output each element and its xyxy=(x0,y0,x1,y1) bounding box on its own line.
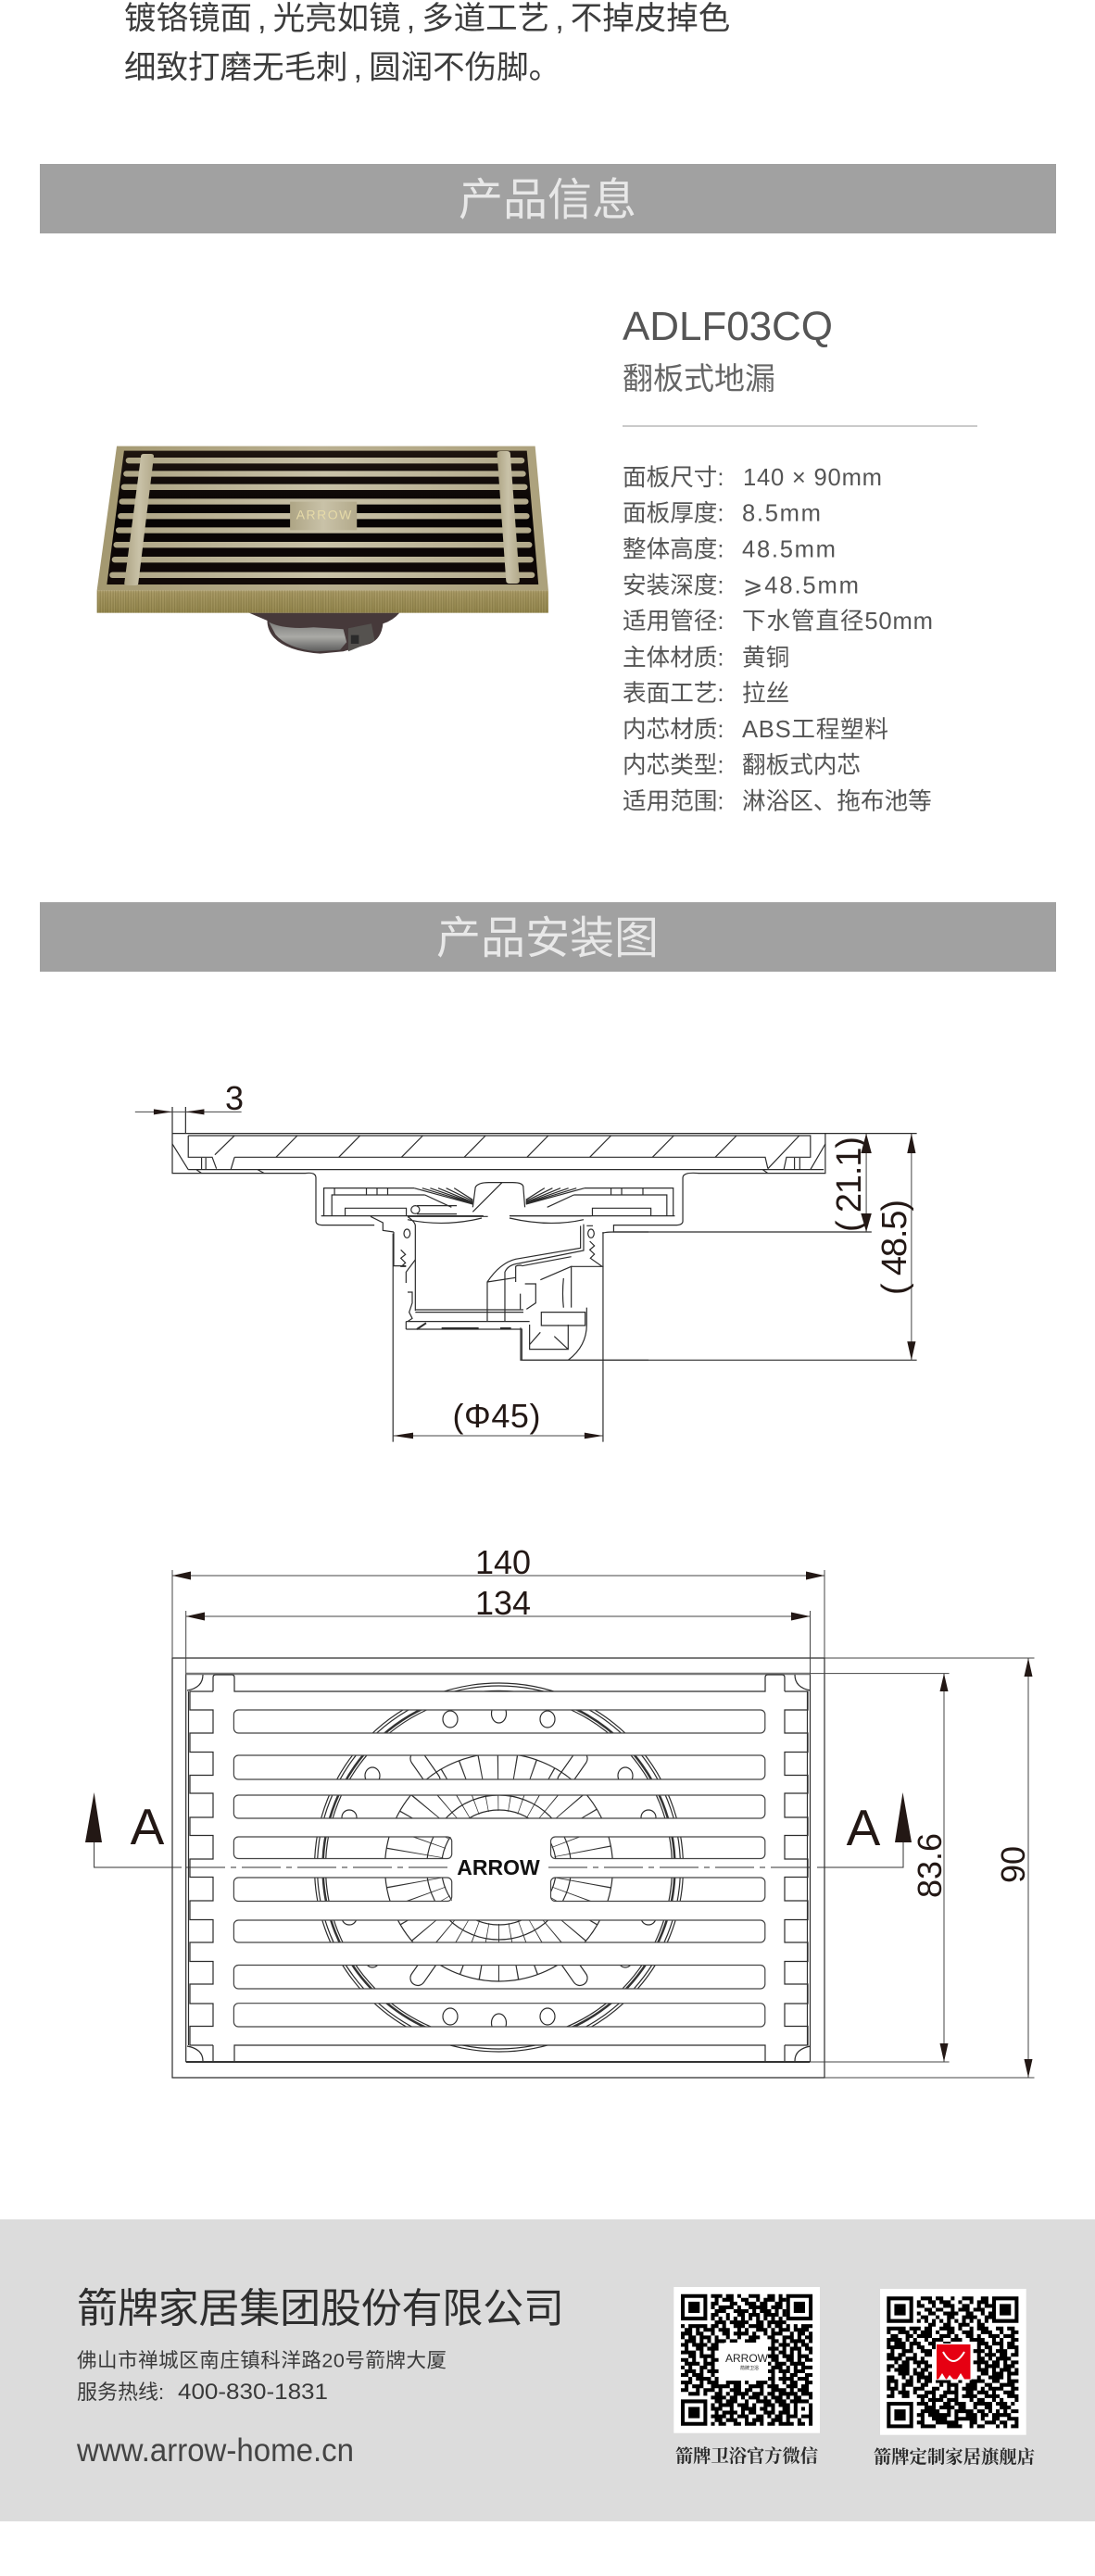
spec list: 面板厚度: xyxy=(623,500,724,526)
section heading: installation diagram xyxy=(40,902,1056,972)
spec list: 淋浴区、拖布池等 xyxy=(742,787,932,815)
grate bars xyxy=(109,451,535,585)
spec list: 面板尺寸: xyxy=(623,464,724,491)
plan view drawing xyxy=(85,1543,1034,2078)
QR caption: flagship store: 箭牌定制家居旗舰店 xyxy=(874,2446,1035,2468)
cross-section drawing xyxy=(135,1079,917,1442)
spec list: ⩾48.5mm xyxy=(743,572,859,598)
model title: ADLF03CQ xyxy=(623,304,833,349)
width dimensions: 134 xyxy=(475,1584,531,1622)
width dimensions: 140 xyxy=(475,1543,531,1581)
website: www.arrow-home.cn xyxy=(76,2432,354,2469)
QR caption: official WeChat: 箭牌卫浴官方微信 xyxy=(675,2446,818,2467)
section outline and flange xyxy=(135,1107,917,1442)
footer panel xyxy=(0,2219,1095,2521)
dimension: 3: 3 xyxy=(225,1079,244,1117)
company name: 箭牌家居集团股份有限公司 xyxy=(77,2286,564,2331)
spec list: 内芯类型: xyxy=(623,752,724,778)
QR code: official WeChat: ARROW xyxy=(725,2352,769,2365)
intro text block: 镀铬镜面,光亮如镜,多道工艺,不掉皮掉色 xyxy=(124,2,730,37)
QR code: official WeChat: 箭牌卫浴 xyxy=(740,2365,759,2371)
dimension: 48.5: ( 48.5) xyxy=(875,1200,914,1295)
intro text block xyxy=(124,2,730,85)
spec list: 主体材质: xyxy=(623,645,724,671)
product type: 翻板式地漏 xyxy=(623,361,775,396)
spec list: ABS工程塑料 xyxy=(742,716,888,743)
intro text block: 细致打磨无毛刺,圆润不伤脚。 xyxy=(124,50,560,85)
grate logo: ARROW xyxy=(457,1855,540,1879)
section line A-A xyxy=(85,1792,912,1867)
section heading: product info: 产品信息 xyxy=(459,176,636,225)
grate slots xyxy=(233,1710,765,2027)
grate outline xyxy=(187,1675,811,2061)
logo on grate: ARROW xyxy=(296,507,353,521)
spec list: 下水管直径50mm xyxy=(742,608,933,635)
panel top face xyxy=(97,446,548,590)
QR code: custom home flagship store xyxy=(880,2289,1026,2435)
dimension: phi 45: (Φ45) xyxy=(452,1397,541,1435)
address: 佛山市禅城区南庄镇科洋路20号箭牌大厦 xyxy=(77,2349,447,2371)
section heading: product info xyxy=(40,164,1056,233)
spec list: 表面工艺: xyxy=(623,680,724,707)
section line A-A: A xyxy=(847,1799,881,1856)
spec list xyxy=(623,464,933,815)
spec list: 适用范围: xyxy=(623,787,724,815)
drain body under the panel xyxy=(249,613,399,654)
spec list: 拉丝 xyxy=(742,680,789,707)
drain strainer seen through slots xyxy=(315,1683,684,2052)
panel front edge xyxy=(97,590,548,613)
hotline: 400-830-1831 xyxy=(178,2380,328,2405)
height dimensions: 83.6 xyxy=(911,1833,949,1898)
panel outer and inner frames xyxy=(172,1658,824,2078)
spec list: 安装深度: xyxy=(623,572,724,598)
height dimensions xyxy=(811,1658,1034,2078)
section heading: installation diagram: 产品安装图 xyxy=(436,914,659,963)
spec list: 翻板式内芯 xyxy=(742,752,861,778)
dimension lines xyxy=(135,1109,915,1439)
spec list: 适用管径: xyxy=(623,608,724,635)
spec list: 8.5mm xyxy=(742,500,821,526)
dimension: 21.1: ( 21.1) xyxy=(830,1137,869,1232)
hotline: 服务热线: xyxy=(77,2381,164,2404)
spec list: 140 × 90mm xyxy=(743,465,882,491)
product photo: floor drain xyxy=(97,446,548,654)
icon: red shopping bag xyxy=(936,2344,971,2381)
drain core detail xyxy=(371,1216,648,1360)
spec list: 整体高度: xyxy=(623,535,724,563)
dark drain opening xyxy=(107,451,538,584)
spec list: 内芯材质: xyxy=(623,716,724,743)
spec list: 48.5mm xyxy=(742,537,836,563)
height dimensions: 90 xyxy=(994,1846,1032,1883)
QR code: official WeChat xyxy=(673,2287,820,2433)
spec list: 黄铜 xyxy=(742,645,789,671)
hotline xyxy=(77,2380,328,2405)
section line A-A: A xyxy=(131,1798,165,1855)
width dimensions xyxy=(172,1543,824,1674)
